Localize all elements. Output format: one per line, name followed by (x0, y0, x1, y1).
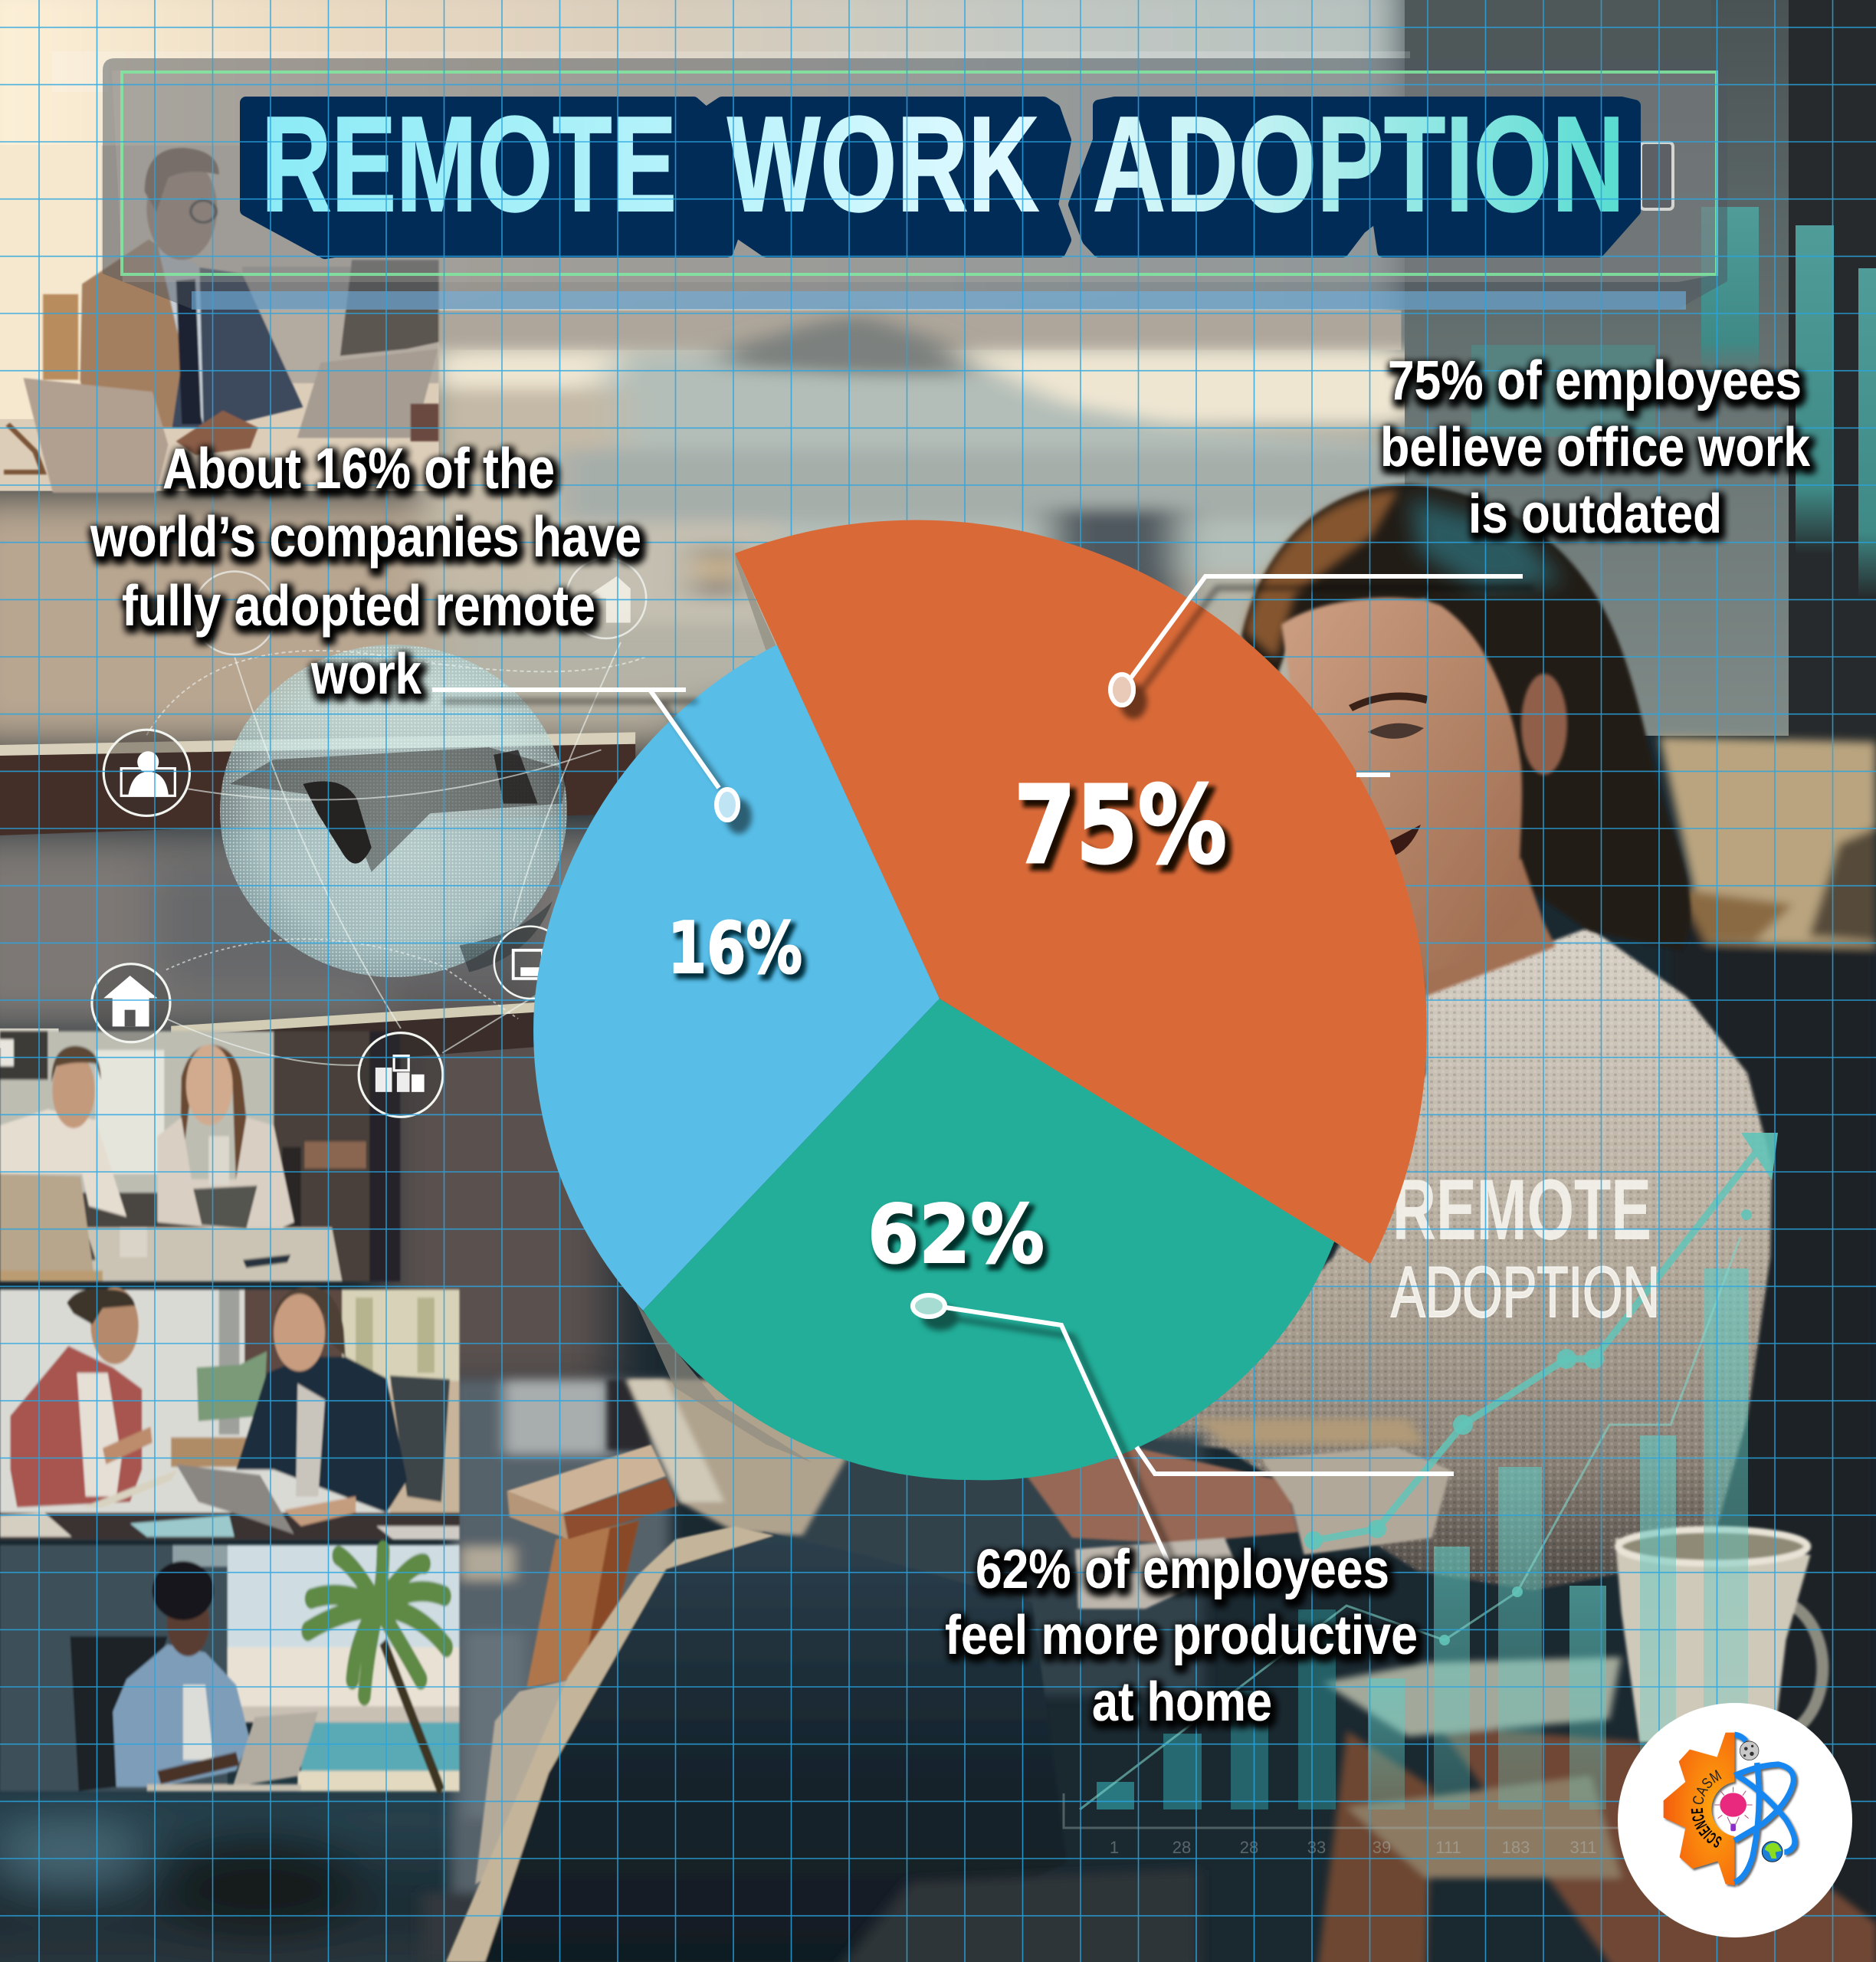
callout: 62 percent: at home (1092, 1672, 1272, 1733)
man photo (0, 146, 438, 493)
photo: woman at beach (0, 1545, 460, 1791)
callout: 75 percent: believe office work (1380, 417, 1811, 478)
value: 16%: 16% (667, 907, 802, 989)
connector: 62 percent lower (1136, 1447, 1454, 1474)
slice: 62 percent (643, 999, 1335, 1480)
connector: 75 percent (1110, 576, 1523, 705)
hologram bar chart (1064, 1133, 1778, 1857)
icon: buildings (359, 1033, 443, 1117)
logo gear (1664, 1733, 1734, 1885)
callout: 16 percent (90, 436, 641, 706)
axis labels: 28 (1240, 1838, 1258, 1857)
title words: REMOTE (261, 88, 677, 240)
logo wordmark: SCIENCE (1691, 1808, 1721, 1848)
axis labels: 28 (1172, 1838, 1191, 1857)
title words: WORK (727, 88, 1039, 240)
axis labels: 311 (1569, 1838, 1597, 1857)
title: REMOTE WORK ADOPTION (246, 88, 1635, 253)
sweater cuff shading (1194, 1419, 1425, 1445)
value: 62%: 62% (867, 1188, 1045, 1281)
face (1281, 598, 1525, 973)
axis labels (1110, 1838, 1597, 1857)
foreground hands, mug and table (1026, 1447, 1876, 1962)
connector: 62 percent (913, 1295, 1172, 1572)
sweater print text (1391, 1162, 1660, 1332)
slice: 16 percent (533, 644, 940, 1311)
sweater print text: REMOTE (1392, 1162, 1651, 1258)
globe network graphic (92, 558, 646, 1117)
sweater knit texture (1150, 927, 1772, 1590)
pie chart (533, 520, 1427, 1480)
callout: 75 percent (1380, 350, 1811, 545)
callout: 62 percent (945, 1539, 1418, 1733)
pie shadow (636, 553, 812, 1462)
logo: ScienceGasm (1618, 1703, 1852, 1937)
axis labels: 39 (1373, 1838, 1391, 1857)
title extrusion (246, 103, 1635, 253)
value: 75%: 75% (1014, 763, 1227, 888)
sofa cushion (1659, 737, 1876, 1962)
logo brain (1714, 1787, 1753, 1831)
chair, laptop and legs (421, 1380, 1203, 1962)
dark wall at right (1405, 0, 1876, 766)
left desk bands (0, 732, 635, 1068)
axis labels: 1 (1110, 1838, 1119, 1857)
callout: 62 percent: 62% of employees (976, 1539, 1389, 1600)
icon: person (103, 730, 189, 815)
connector: stray tick (1356, 773, 1390, 777)
icon: top house (566, 558, 646, 638)
icon: house (92, 964, 170, 1042)
sweater (1150, 927, 1772, 1590)
calendar icon behind title (1641, 143, 1673, 209)
callout: 75 percent: 75% of employees (1388, 350, 1802, 412)
photo: two women at table (0, 1032, 400, 1281)
title panel (52, 51, 1727, 310)
icon: hidden circle (193, 572, 276, 655)
logo wordmark (1691, 1770, 1721, 1848)
callout: 16 percent: About 16% of the (162, 436, 555, 500)
axis labels: 183 (1502, 1838, 1530, 1857)
callout: 62 percent: feel more productive (945, 1605, 1418, 1666)
icon: form (494, 927, 566, 999)
slice: 75 percent (735, 520, 1427, 1264)
far background blur (0, 0, 1410, 1962)
connector: 16 percent (432, 690, 738, 820)
callout: 16 percent: fully adopted remote (122, 573, 595, 638)
axis labels: 111 (1435, 1838, 1461, 1857)
hazy skyline (429, 310, 1425, 623)
logo moon (1740, 1741, 1759, 1760)
woman figure (1150, 484, 1772, 1590)
logo atom (1734, 1734, 1795, 1882)
photos of remote workers (0, 1032, 460, 1791)
neck (1409, 858, 1556, 996)
callout: 16 percent: world’s companies have (90, 504, 641, 569)
hologram line chart (1080, 1133, 1778, 1809)
title words (261, 88, 1625, 240)
title words: ADOPTION (1093, 88, 1625, 240)
axis labels: 33 (1307, 1838, 1326, 1857)
callout: 75 percent: is outdated (1468, 484, 1722, 545)
logo wordmark: CASM (1693, 1770, 1721, 1804)
callout: 16 percent: work (310, 641, 421, 706)
logo earth (1762, 1842, 1783, 1862)
hair (1241, 484, 1691, 950)
sweater print text: ADOPTION (1391, 1252, 1660, 1332)
photo: two women with laptops (0, 1287, 460, 1540)
